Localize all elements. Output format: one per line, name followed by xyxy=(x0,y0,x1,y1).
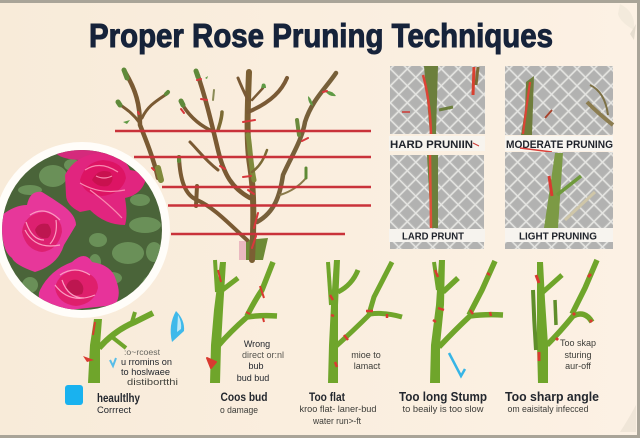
bush base xyxy=(239,241,247,260)
main trunk xyxy=(248,72,253,260)
trunk side branches xyxy=(248,78,287,112)
blue accent marks xyxy=(65,311,465,405)
pruning type panels xyxy=(389,66,613,249)
caption: wrong bud: bub xyxy=(248,361,264,371)
caption: too flat: Too flat xyxy=(309,390,345,404)
caption: too sharp angle xyxy=(505,338,599,415)
lower left branch xyxy=(179,157,247,240)
panel: light pruning xyxy=(505,152,613,249)
caption: too flat: kroo flat- laner-bud xyxy=(300,404,376,415)
caption: healthy correct: Corrrect xyxy=(97,405,131,416)
left upper branch xyxy=(197,73,250,198)
sprig: wrong bud xyxy=(207,260,277,383)
pruning examples xyxy=(83,260,597,383)
pruned rose bush diagram xyxy=(118,70,336,260)
title: Proper Rose Pruning Techniques xyxy=(89,17,553,54)
sprig: too long stump xyxy=(430,260,503,383)
caption: too long stump: Too long Stump xyxy=(399,390,487,404)
panel: moderate pruning: MODERATE PRUNING xyxy=(506,139,613,151)
small leaves xyxy=(325,91,336,96)
caption: too flat xyxy=(300,350,381,427)
caption: wrong bud: bud bud xyxy=(237,373,269,383)
caption: healthy correct xyxy=(97,348,178,416)
caption: too sharp angle: Too sharp angle xyxy=(505,390,599,404)
panel: hard pruning xyxy=(389,66,485,151)
caption: wrong bud: Wrong xyxy=(244,339,270,349)
sprig: too sharp angle xyxy=(533,260,597,383)
caption: too long stump xyxy=(399,390,487,415)
panel: lard prunt: LARD PRUNT xyxy=(402,230,465,242)
caption: healthy correct: distibortthi xyxy=(127,377,178,388)
caption: wrong bud: o damage xyxy=(220,405,258,416)
caption: wrong bud: Coos bud xyxy=(220,390,268,404)
caption: too flat: lamact xyxy=(354,361,381,371)
caption: too sharp angle: sturing xyxy=(564,350,592,360)
left rose xyxy=(2,192,76,272)
caption: healthy correct: :o~rcoest xyxy=(124,348,161,357)
panel: light pruning: LIGHT PRUNING xyxy=(519,230,597,242)
rose photo circle xyxy=(0,142,170,318)
caption: healthy correct: to hoslwaee xyxy=(121,367,170,378)
green tips xyxy=(124,70,127,78)
caption: healthy correct: u rromins on xyxy=(121,357,172,368)
caption: too sharp angle: aur-off xyxy=(565,361,591,371)
panel: hard pruning: HARD PRUNIIN xyxy=(390,139,473,151)
red cut marks on bush xyxy=(138,79,327,248)
caption: healthy correct: heaultlhy xyxy=(97,391,140,405)
sprig: too flat xyxy=(328,260,402,383)
caption: wrong bud: direct or:nl xyxy=(242,350,284,360)
caption: too sharp angle: Too skap xyxy=(560,338,596,348)
red pruning guide lines xyxy=(115,131,371,234)
panel: moderate pruning xyxy=(505,66,613,152)
caption: too flat: mioe to xyxy=(351,350,381,360)
panel: lard prunt xyxy=(389,155,485,249)
sprig: correct cut xyxy=(83,312,153,383)
bottom rose xyxy=(39,256,119,312)
left tree xyxy=(125,72,158,178)
caption: too flat: water run>-ft xyxy=(312,416,361,427)
foliage xyxy=(18,159,162,294)
top rose xyxy=(57,150,107,160)
caption: too long stump: to beaily is too slow xyxy=(402,404,484,415)
caption: wrong bud xyxy=(220,339,284,416)
caption: too sharp angle: om eaisitaly infecced xyxy=(508,404,588,415)
right branch xyxy=(257,73,336,222)
